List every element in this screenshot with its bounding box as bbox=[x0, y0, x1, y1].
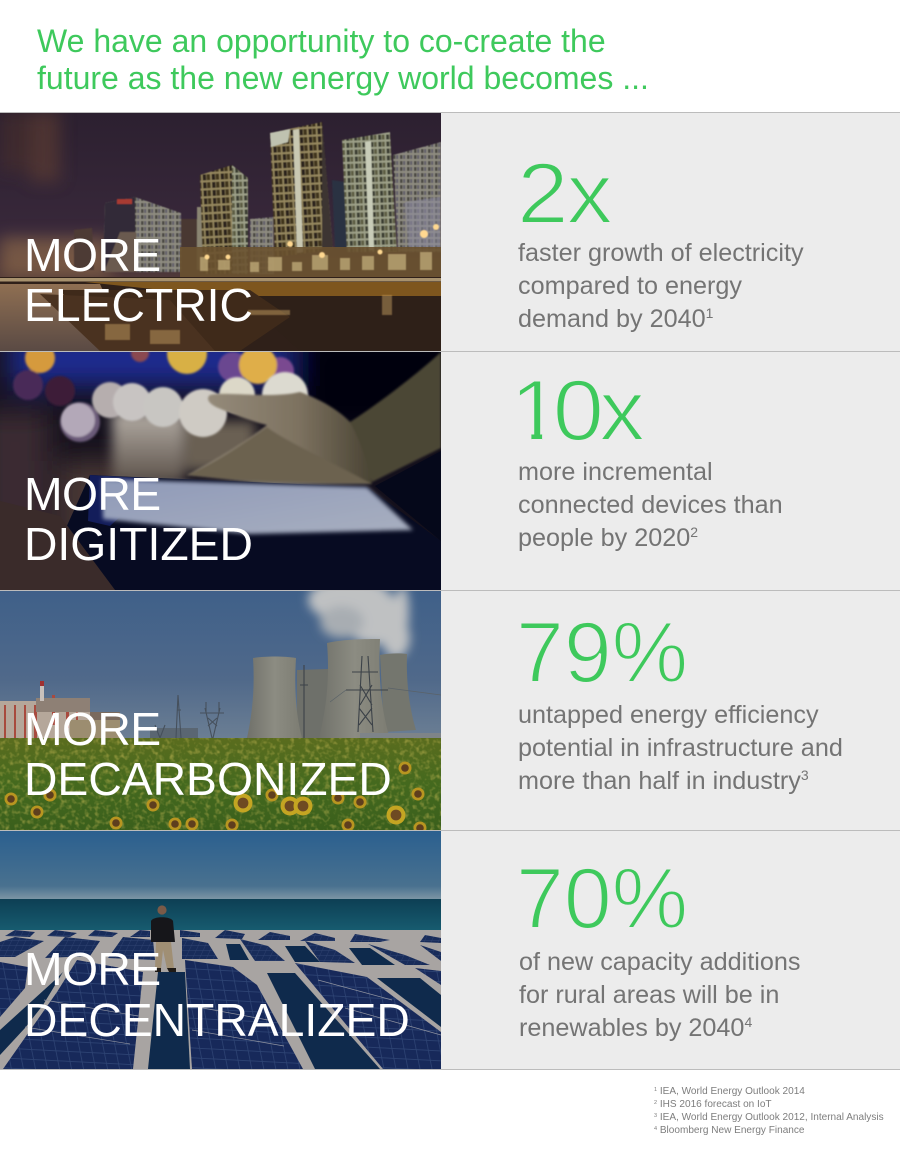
label: more electric bbox=[24, 229, 253, 331]
footnotes: 1 IEA, World Energy Outlook 2014 bbox=[654, 1086, 805, 1097]
skyscrapers bbox=[74, 122, 441, 274]
stat: 2x: 2x bbox=[517, 146, 611, 242]
text: capacity additions: for rural areas will be in bbox=[519, 981, 779, 1009]
text: capacity additions: renewables by 20404 bbox=[519, 1014, 752, 1042]
label: more digitized: DIGITIZED bbox=[24, 518, 253, 570]
tablet bbox=[60, 475, 441, 590]
label: more decarbonized bbox=[24, 703, 392, 805]
footnotes: 2 IHS 2016 forecast on IoT bbox=[654, 1099, 772, 1110]
panel: more decentralized bbox=[0, 830, 900, 1069]
text: capacity additions bbox=[519, 948, 800, 1042]
water and riverbank bbox=[0, 277, 441, 351]
photo: city skyline at night bbox=[0, 113, 441, 351]
text: energy efficiency bbox=[518, 701, 843, 795]
panel: more decarbonized bbox=[0, 590, 900, 830]
text: faster growth: compared to energy bbox=[518, 272, 742, 300]
stat: 79%: 79% bbox=[516, 605, 688, 701]
street level glow bbox=[180, 247, 441, 277]
steam plume bbox=[308, 578, 410, 658]
label: more digitized bbox=[24, 468, 253, 570]
text: faster growth: faster growth of electricity bbox=[518, 239, 804, 267]
text: connected devices: connected devices than bbox=[518, 491, 783, 519]
text: energy efficiency: untapped energy efficiency bbox=[518, 701, 819, 729]
label: more electric: MORE bbox=[24, 229, 160, 281]
footnotes: 4 Bloomberg New Energy Finance bbox=[654, 1125, 804, 1136]
footnotes bbox=[654, 1086, 884, 1136]
panel: more digitized bbox=[0, 351, 900, 590]
photo: cooling towers and sunflower field bbox=[0, 591, 441, 830]
stat: 70%: 70% bbox=[516, 851, 688, 947]
label: more decentralized bbox=[24, 943, 410, 1046]
background colour wash bbox=[0, 331, 460, 591]
label: more electric: ELECTRIC bbox=[24, 279, 253, 331]
text: connected devices: more incremental bbox=[518, 458, 713, 486]
cooling towers bbox=[247, 639, 416, 738]
pylons bbox=[155, 695, 224, 738]
title: future as the new energy world becomes ... bbox=[37, 60, 649, 96]
stat: 10x: 0x bbox=[553, 363, 645, 459]
sunflower field bbox=[0, 738, 441, 830]
sky haze bbox=[0, 112, 110, 277]
text: faster growth: demand by 20401 bbox=[518, 305, 713, 333]
text: energy efficiency: potential in infrastructure and bbox=[518, 734, 843, 762]
text: faster growth bbox=[518, 239, 804, 333]
hand and forearm bbox=[187, 352, 441, 484]
title: We have an opportunity to co-create the bbox=[37, 23, 606, 59]
label: more decentralized: MORE bbox=[24, 943, 160, 995]
nuclear plant buildings bbox=[0, 681, 198, 738]
stat: 10x: 1 bbox=[510, 363, 561, 459]
second row of panels bbox=[0, 937, 441, 965]
front row of panels bbox=[0, 960, 441, 1069]
man standing bbox=[151, 905, 176, 972]
photo: man standing among solar panels by the sea bbox=[0, 831, 441, 1069]
label: more decarbonized: MORE bbox=[24, 703, 160, 755]
rooftop bbox=[0, 930, 441, 1069]
text: connected devices: people by 20202 bbox=[518, 524, 698, 552]
label: more decentralized: DECENTRALIZED bbox=[24, 994, 410, 1046]
bokeh lights bbox=[13, 334, 294, 442]
footnotes: 3 IEA, World Energy Outlook 2012, Internal Analysis bbox=[654, 1112, 884, 1123]
far row of panels bbox=[5, 930, 441, 943]
photo: hand over tablet with bokeh lights bbox=[0, 352, 441, 590]
title bbox=[37, 23, 649, 96]
label: more digitized: MORE bbox=[24, 468, 160, 520]
panel: more electric bbox=[0, 112, 900, 351]
text: energy efficiency: more than half in industry3 bbox=[518, 767, 809, 795]
text: capacity additions: of new capacity additions bbox=[519, 948, 800, 976]
text: connected devices bbox=[518, 458, 783, 552]
transmission tower bbox=[300, 656, 441, 740]
label: more decarbonized: DECARBONIZED bbox=[24, 753, 392, 805]
